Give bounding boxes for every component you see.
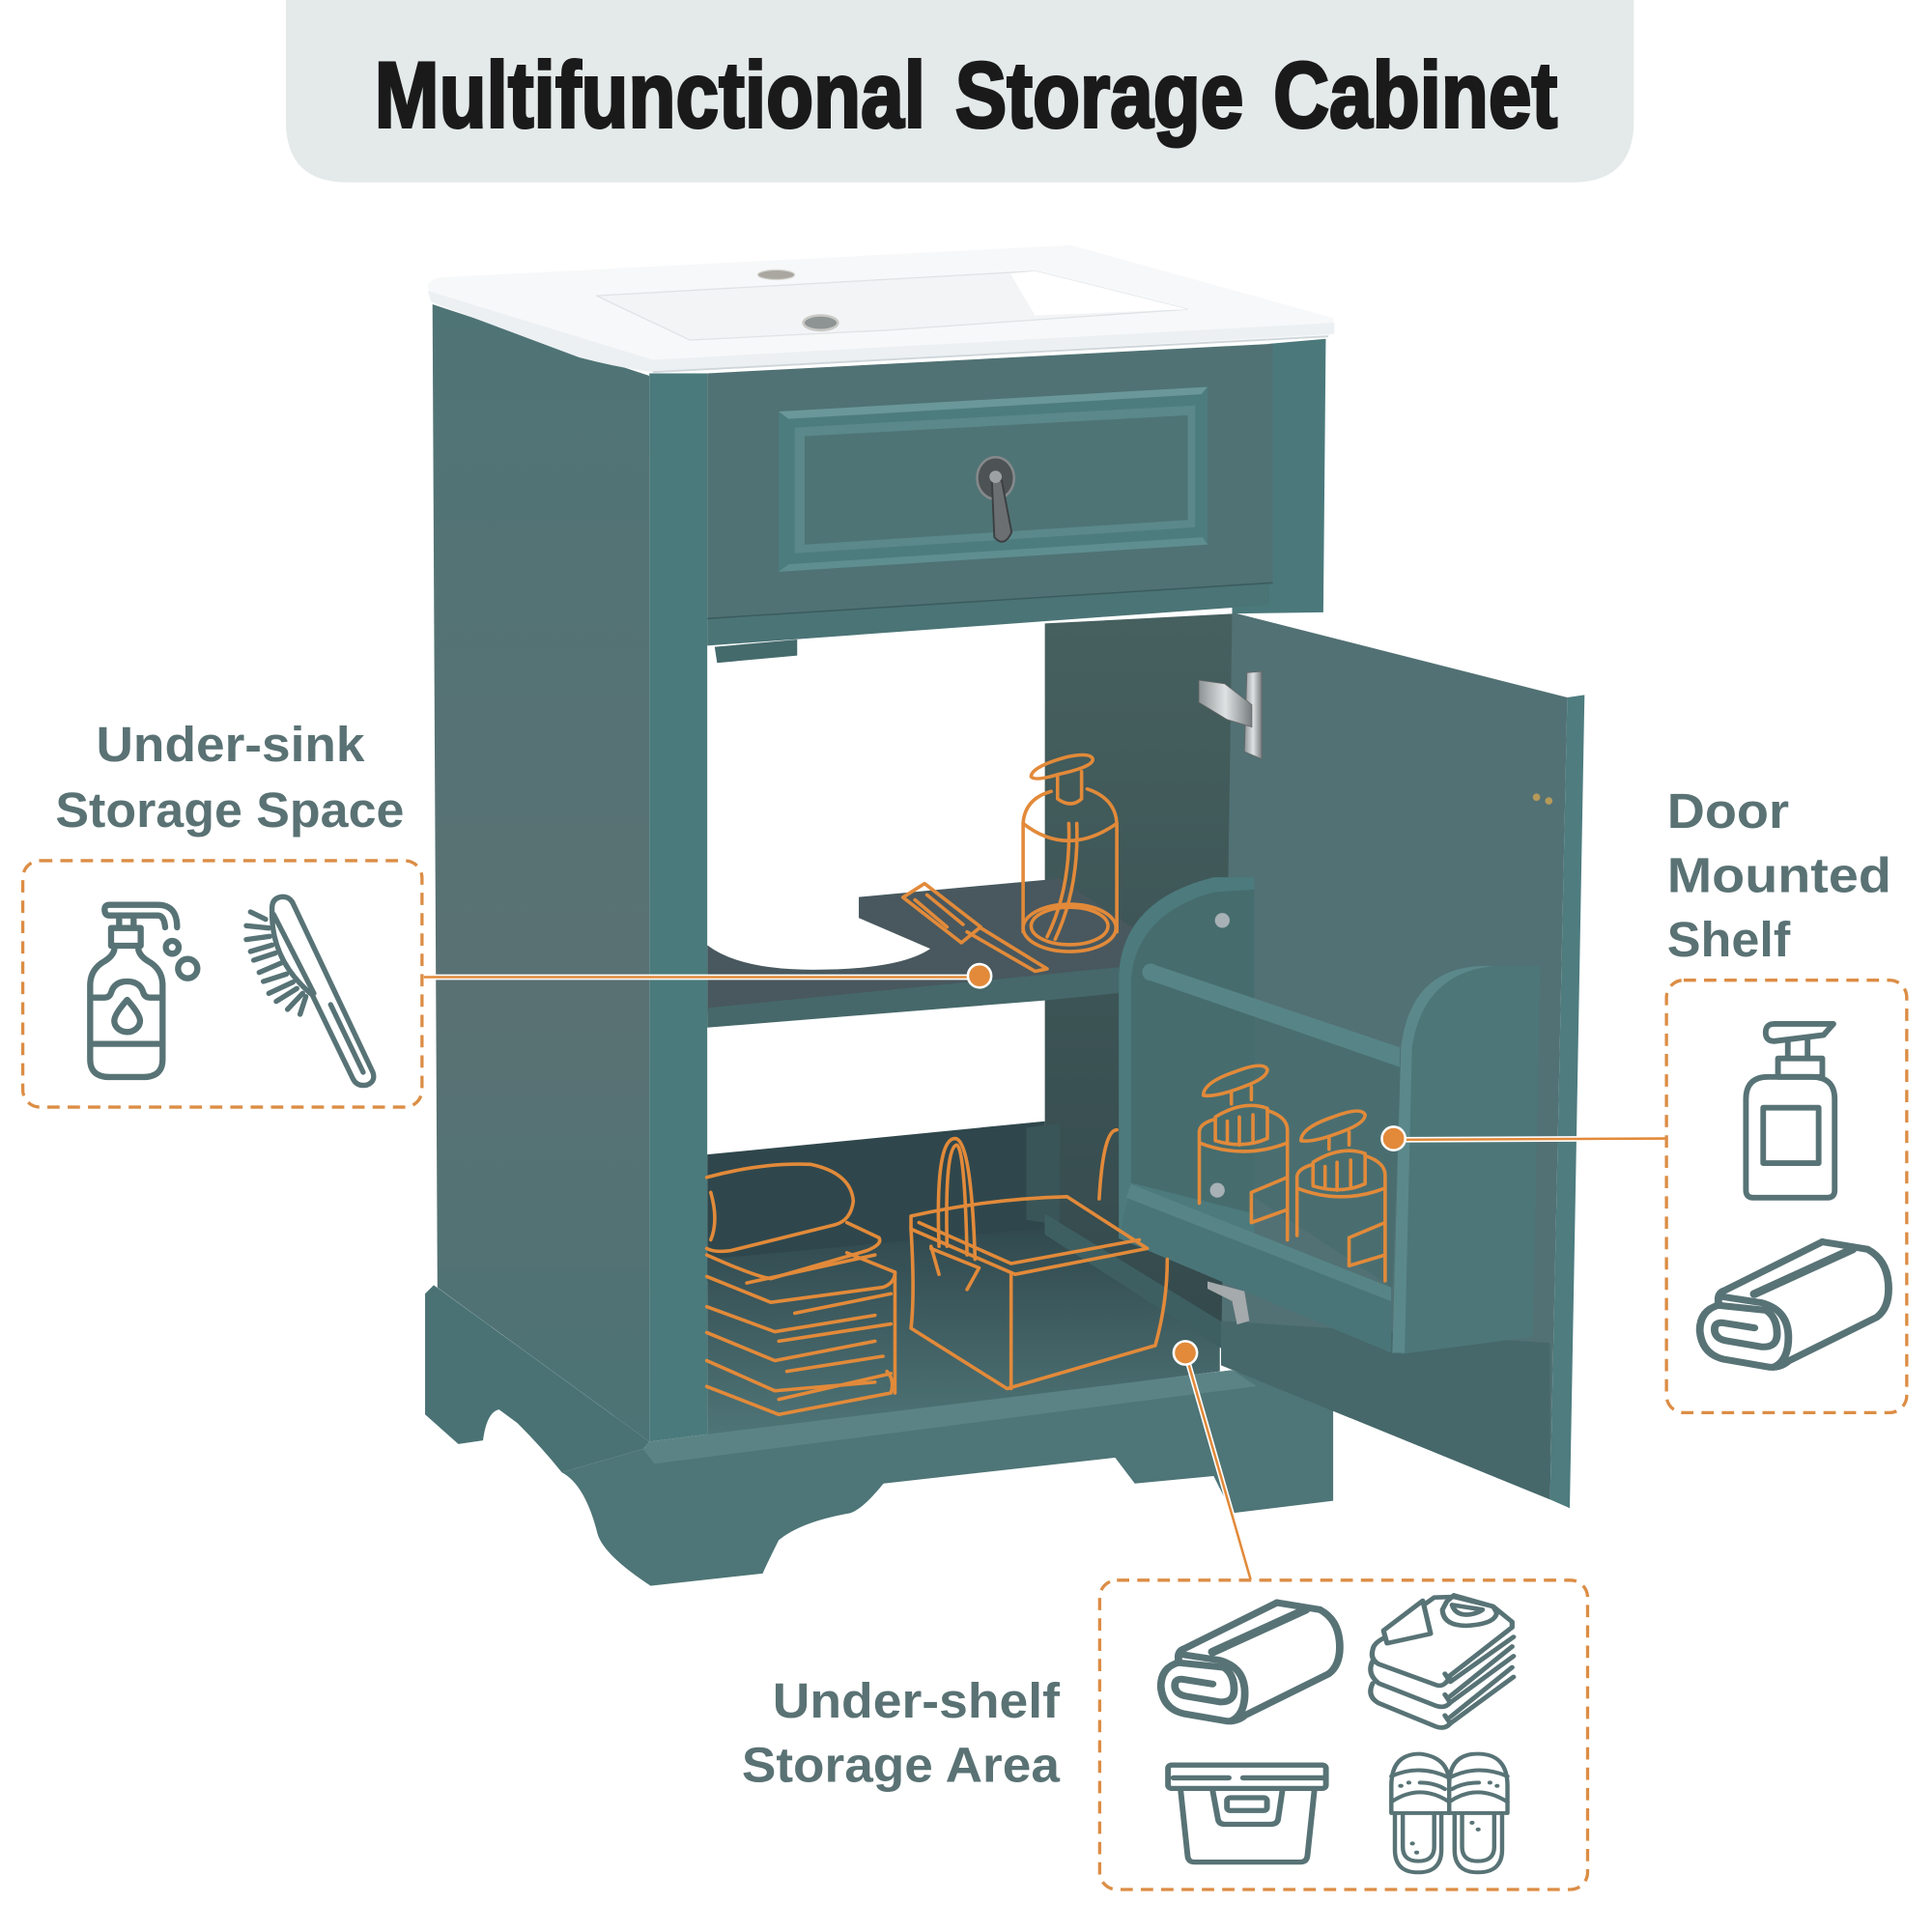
icon: rolled towel [1700, 1242, 1889, 1367]
icon: rolled towel [1161, 1603, 1340, 1721]
icon: folded clothes [1371, 1595, 1514, 1727]
rail under drawer [707, 582, 1273, 645]
overflow hole [804, 316, 838, 330]
icon: storage box [1168, 1765, 1326, 1862]
drawer front [707, 344, 1273, 618]
title banner [286, 0, 1634, 183]
caddy rail [1151, 963, 1400, 1067]
caddy right side [1401, 966, 1540, 1354]
icon: hairbrush [246, 896, 374, 1086]
panel: under-sink storage space [23, 717, 422, 1107]
caddy front lip [1119, 1184, 1391, 1353]
panel: door mounted shelf [1666, 783, 1907, 1412]
plinth base [425, 1285, 1333, 1586]
open door [1221, 612, 1584, 1508]
heading: storage space: Storage Space [55, 782, 404, 838]
dashed box [1666, 980, 1907, 1412]
sink top [428, 245, 1334, 372]
heading: shelf: Shelf [1667, 912, 1791, 967]
heading: storage area: Storage Area [742, 1737, 1061, 1792]
orange sketch: caddy bottles [1200, 1065, 1385, 1281]
dashed box [1099, 1580, 1587, 1889]
orange sketch: under-sink bottle and comb [903, 755, 1117, 971]
orange sketch: towel stack and bag [707, 1130, 1167, 1414]
interior right wall [1045, 613, 1236, 1346]
heading: under-sink: Under-sink [96, 717, 365, 772]
cabinet illustration [425, 245, 1584, 1586]
lower hinge [1208, 1282, 1249, 1324]
upper hinge [1199, 671, 1262, 759]
interior floor [707, 1229, 1220, 1436]
front left stile [649, 373, 707, 1441]
interior back wall [707, 1122, 1045, 1282]
rail block [715, 639, 797, 663]
open shelf [707, 878, 1146, 1028]
right front stile [1233, 339, 1325, 613]
leader line: under-sink [424, 964, 991, 987]
heading: under-shelf: Under-shelf [773, 1673, 1061, 1728]
icon: slippers [1391, 1754, 1508, 1872]
icon: pump bottle [90, 905, 197, 1077]
faucet hole [757, 270, 795, 280]
lower wall rail [1045, 1213, 1233, 1355]
title: Multifunctional Storage Cabinet [375, 42, 1557, 147]
heading: door: Door [1667, 783, 1789, 838]
caddy screws [1215, 913, 1230, 927]
dashed box [23, 861, 422, 1107]
left side panel [433, 304, 649, 1441]
door screws [1533, 793, 1540, 801]
icon: pump bottle [1746, 1024, 1834, 1198]
panel: under-shelf storage area [742, 1580, 1587, 1889]
leader line: under-shelf [1174, 1341, 1251, 1579]
heading: mounted: Mounted [1667, 847, 1891, 902]
leader line: door shelf [1381, 1126, 1665, 1151]
wall bracket [1026, 1123, 1060, 1225]
drawer knob [977, 457, 1014, 542]
door mounted caddy [1119, 877, 1540, 1354]
